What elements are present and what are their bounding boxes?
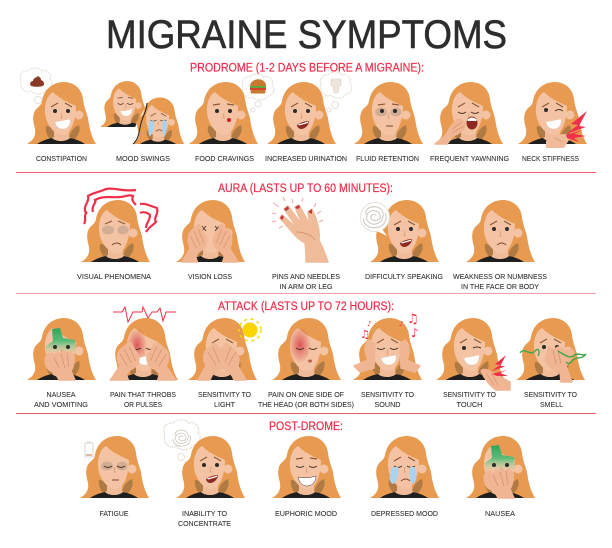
symptom: euphoric mood (272, 436, 341, 498)
symptom: sensitivity to sound: ♫ (360, 328, 370, 341)
label: difficulty speaking: DIFFICULTY SPEAKING (365, 272, 443, 281)
symptom: fluid retention (354, 82, 423, 144)
label: pain that throbs (110, 390, 176, 409)
heading: post-drome: POST-DROME: (269, 421, 343, 433)
symptom: pain that throbs (109, 307, 178, 380)
label: pins and needles (272, 272, 340, 291)
label: sensitivity to light (198, 390, 251, 409)
symptom: pins and needles (272, 197, 328, 262)
symptom: sensitivity to smell (516, 318, 586, 382)
label: inability to concentrate (178, 509, 231, 528)
label: frequent yawning: FREQUENT YAWNNING (430, 154, 509, 163)
heading: attack: ATTACK (LASTS UP TO 72 HOURS): (218, 301, 394, 313)
label: fatigue: FATIGUE (100, 509, 129, 518)
symptom: weakness or numbness (466, 200, 535, 262)
label: sensitivity to light: SENSITIVITY TO (198, 390, 251, 399)
symptom: neck stiffness (518, 82, 587, 148)
label: increased urination: INCREASED URINATION (265, 154, 347, 163)
label: neck stiffness: NECK STIFFNESS (522, 154, 579, 163)
label: sensitivity to touch: TOUCH (456, 400, 482, 409)
label: inability to concentrate: CONCENTRATE (178, 519, 231, 528)
symptom: sensitivity to touch (436, 318, 510, 390)
symptom: nausea (466, 436, 535, 498)
label: nausea and vomiting (34, 390, 88, 409)
symptom: vision loss (176, 200, 245, 262)
label: food cravings: FOOD CRAVINGS (195, 154, 254, 163)
label: pain that throbs: OR PULSES (124, 400, 162, 409)
symptom: sensitivity to sound: ♪ (367, 320, 371, 328)
symptom: mood swings (100, 81, 184, 144)
label: sensitivity to smell: SENSITIVITY TO (524, 390, 577, 399)
label: euphoric mood: EUPHORIC MOOD (275, 509, 337, 518)
label: constipation: CONSTIPATION (36, 154, 87, 163)
label: sensitivity to smell (524, 390, 577, 409)
symptom: sensitivity to sound: ♫ (407, 312, 419, 327)
symptom: visual phenomena (81, 189, 157, 262)
label: pain that throbs: PAIN THAT THROBS (110, 390, 176, 399)
symptom: pain on one side (272, 318, 341, 380)
label: mood swings: MOOD SWINGS (116, 154, 170, 163)
symptom: difficulty speaking (360, 200, 439, 262)
label: pins and needles: IN ARM OR LEG (280, 282, 333, 291)
symptom: sensitivity to sound (353, 312, 422, 380)
label: pain on one side: THE HEAD (OR BOTH SIDES) (258, 400, 354, 409)
label: sensitivity to sound: SENSITIVITY TO (361, 390, 414, 399)
label: nausea and vomiting: NAUSEA (46, 390, 76, 399)
symptom: sensitivity to sound: ♪ (399, 320, 403, 328)
symptom: nausea and vomiting (27, 318, 96, 380)
label: inability to concentrate: INABILITY TO (182, 509, 227, 518)
label: sensitivity to light: LIGHT (214, 400, 235, 409)
label: pain on one side: PAIN ON ONE SIDE OF (268, 390, 344, 399)
label: sensitivity to sound (361, 390, 414, 409)
label: pins and needles: PINS AND NEEDLES (272, 272, 340, 281)
label: weakness or numbness: WEAKNESS OR NUMBNESS (453, 272, 547, 281)
symptom: sensitivity to light (188, 318, 261, 380)
label: nausea and vomiting: AND VOMITING (34, 400, 88, 409)
label: nausea: NAUSEA (485, 509, 515, 518)
label: sensitivity to touch: SENSITIVITY TO (443, 390, 496, 399)
label: fluid retention: FLUID RETENTION (356, 154, 419, 163)
symptom: increased urination (267, 72, 352, 144)
symptom: food cravings (189, 74, 274, 144)
symptom: sensitivity to sound: ♪ (411, 326, 419, 340)
label: weakness or numbness: IN THE FACE OR BODY (461, 282, 539, 291)
symptom: fatigue (80, 436, 149, 498)
label: sensitivity to sound: SOUND (374, 400, 400, 409)
symptom: depressed mood (370, 436, 439, 498)
label: weakness or numbness (453, 272, 547, 291)
symptom: constipation (20, 68, 96, 144)
heading: aura: AURA (LASTS UP TO 60 MINUTES): (218, 183, 393, 195)
label: pain on one side (258, 390, 354, 409)
label: vision loss: VISION LOSS (188, 272, 232, 281)
label: visual phenomena: VISUAL PHENOMENA (77, 272, 151, 281)
label: sensitivity to smell: SMELL (540, 400, 563, 409)
symptom: frequent yawning (434, 82, 503, 144)
symptom: inability to concentrate (164, 420, 245, 498)
label: sensitivity to touch (443, 390, 496, 409)
title: MIGRAINE SYMPTOMS (106, 13, 507, 57)
label: depressed mood: DEPRESSED MOOD (371, 509, 438, 518)
heading: prodrome: PRODROME (1-2 DAYS BEFORE A MIGRAINE): (190, 62, 424, 74)
